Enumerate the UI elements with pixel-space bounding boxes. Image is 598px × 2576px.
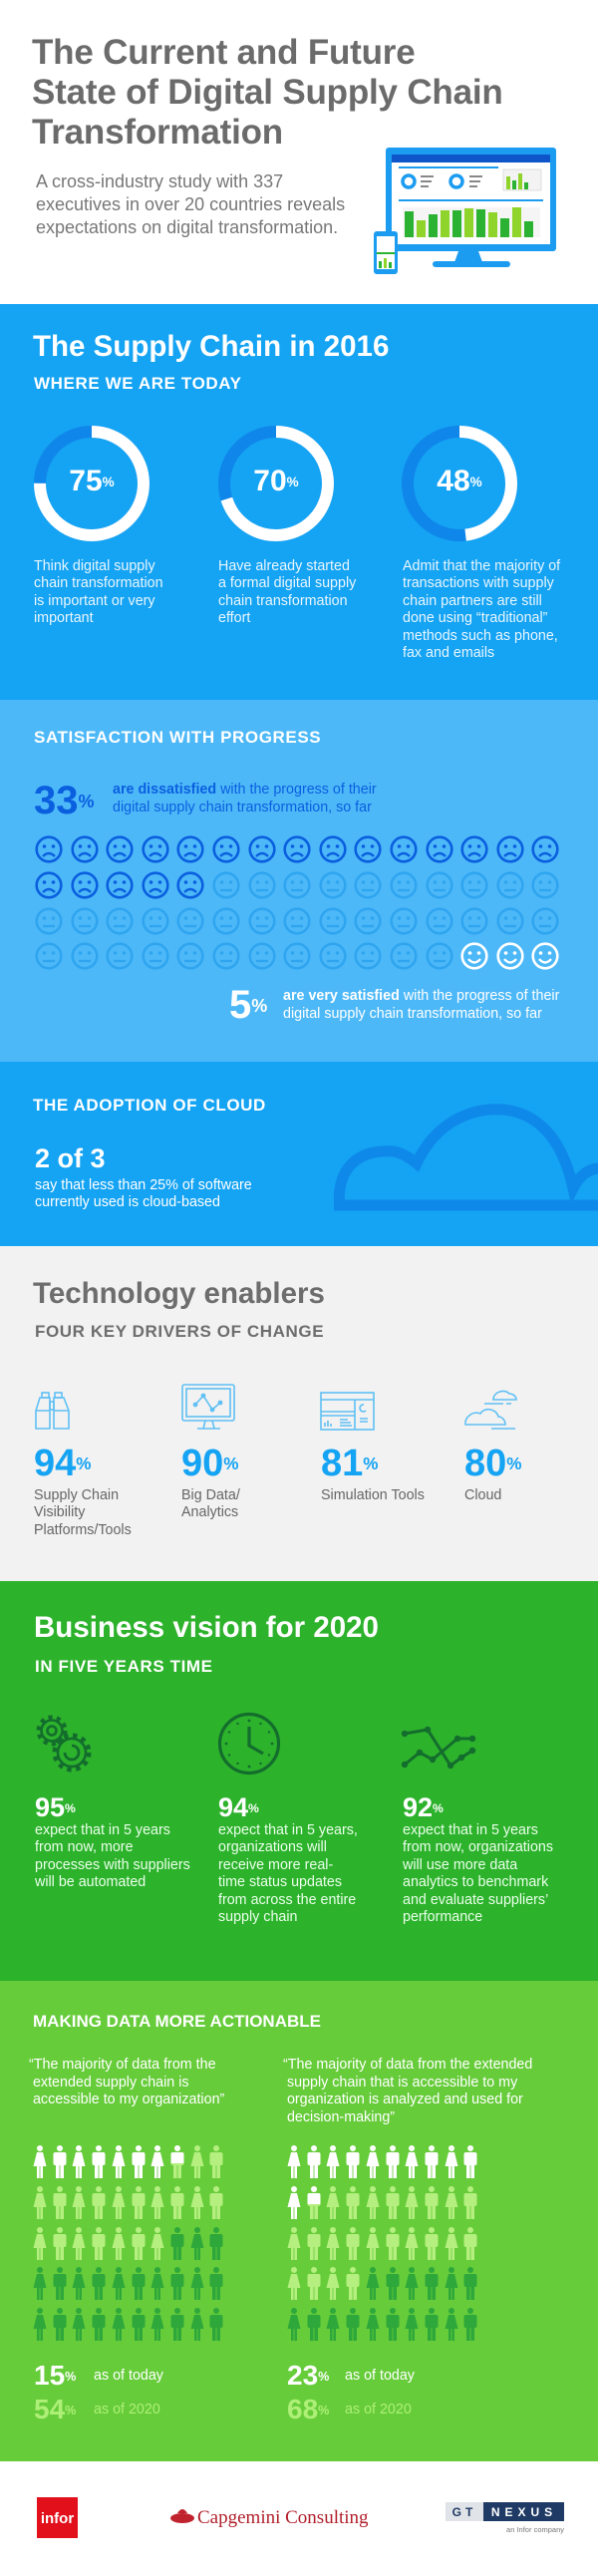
logo: GT Nexus: GT: [452, 2505, 476, 2519]
stat: 80% cloud: 80%: [464, 1443, 521, 1484]
subheading: where we are today: WHERE WE ARE TODAY: [34, 374, 242, 393]
title: The Current and Future: [32, 33, 415, 72]
heading: satisfaction with progress: SATISFACTION WITH PROGRESS: [34, 728, 321, 747]
text: 75% description: [34, 558, 163, 626]
icon: gears: [39, 1718, 89, 1770]
text: dissatisfied: digital supply chain transformation, so far: [113, 800, 372, 815]
stat: 15% today / 54% 2020: 54%: [34, 2394, 76, 2424]
text: 48% description: chain partners are still: [403, 593, 542, 609]
stat: 95% automated: 95%: [35, 1792, 76, 1822]
stat: 15% today / 54% 2020: as of today: [94, 2368, 163, 2384]
stat: 23% today / 68% 2020: as of today: [345, 2368, 415, 2384]
donut chart: 75%: [40, 432, 144, 535]
quote: accessible: “The majority of data from the: [29, 2057, 216, 2073]
logo: infor: infor: [41, 2510, 74, 2527]
text: 70% description: effort: [218, 610, 250, 626]
quote: accessible: [29, 2057, 224, 2107]
stat: 90% big data: Big Data/: [181, 1487, 240, 1503]
text: cloud statement: say that less than 25% of software: [35, 1177, 252, 1193]
stat: 23% today / 68% 2020: [287, 2360, 415, 2424]
subheading: in five years time: IN FIVE YEARS TIME: [35, 1657, 213, 1676]
icon: line chart: [402, 1727, 475, 1769]
stat: 92% analytics: [403, 1792, 553, 1925]
stat: 94% real-time: expect that in 5 years,: [218, 1822, 358, 1838]
stat: 5% very satisfied: 5%: [229, 983, 267, 1027]
text: 75% description: Think digital supply: [34, 558, 155, 574]
text: 48% description: fax and emails: [403, 645, 494, 661]
stat: 92% analytics: 92%: [403, 1792, 444, 1822]
stat: 80% cloud: [464, 1443, 521, 1503]
quote: accessible: accessible to my organization”: [33, 2092, 224, 2107]
text: 70% description: [218, 558, 357, 626]
background: satisfaction: [0, 700, 598, 1062]
logo: GT Nexus: an Infor company: [506, 2525, 564, 2534]
icon: binoculars: [36, 1393, 69, 1429]
text: 70% description: chain transformation: [218, 593, 348, 609]
text: dissatisfied: [113, 782, 377, 815]
heading: making data more actionable: MAKING DATA MORE ACTIONABLE: [33, 2012, 321, 2031]
stat: 92% analytics: expect that in 5 years: [403, 1822, 538, 1838]
donut chart: 70%: [224, 432, 328, 535]
background: cloud: [0, 1062, 598, 1246]
stat: 75%: 75%: [69, 465, 115, 497]
stat: 90% big data: [181, 1443, 240, 1520]
stat: 94% visibility: 94%: [34, 1443, 91, 1484]
quote: accessible: extended supply chain is: [33, 2075, 189, 2091]
donut chart: 48%: [408, 432, 511, 535]
stat: 95% automated: will be automated: [35, 1874, 146, 1890]
text: 48% description: Admit that the majority of: [403, 558, 560, 574]
text: 48% description: done using “traditional”: [403, 610, 547, 626]
stat: 94% real-time: 94%: [218, 1792, 259, 1822]
stat: 23% today / 68% 2020: as of 2020: [345, 2402, 412, 2417]
title: Transformation: [32, 113, 283, 152]
stat: 94% visibility: [34, 1443, 132, 1538]
face grid: satisfaction: [37, 837, 557, 968]
text: 75% description: chain transformation: [34, 575, 163, 591]
quote: analyzed: supply chain that is accessible to my: [287, 2075, 517, 2091]
stat: 90% big data: Analytics: [181, 1504, 238, 1520]
stat: 80% cloud: Cloud: [464, 1487, 501, 1503]
subheading: four key drivers: FOUR KEY DRIVERS OF CHANGE: [35, 1322, 324, 1341]
stat: 94% visibility: Supply Chain: [34, 1487, 119, 1503]
icon: cloud outline: [334, 1110, 598, 1207]
stat: 48%: 48%: [437, 465, 482, 497]
stat: 95% automated: expect that in 5 years: [35, 1822, 170, 1838]
stat: 81% simulation: [321, 1443, 425, 1503]
logo: GT Nexus: NEXUS: [491, 2505, 557, 2519]
quote: analyzed: “The majority of data from the extended: [283, 2057, 532, 2073]
stat: 95% automated: processes with suppliers: [35, 1857, 190, 1873]
stat: 15% today / 54% 2020: 15%: [34, 2360, 76, 2391]
stat: 94% real-time: [218, 1792, 358, 1925]
quote: analyzed: decision-making”: [287, 2109, 395, 2125]
heading: technology enablers: Technology enablers: [33, 1277, 325, 1310]
stat: 23% today / 68% 2020: 23%: [287, 2360, 329, 2391]
text: 70% description: a formal digital supply: [218, 575, 356, 591]
text: very satisfied: digital supply chain transformation, so far: [283, 1005, 542, 1021]
background: technology: [0, 1246, 598, 1581]
text: very satisfied: are very satisfied with the progress of their: [283, 988, 559, 1004]
stat: 94% real-time: receive more real-: [218, 1857, 333, 1873]
stat: 94% real-time: supply chain: [218, 1909, 297, 1925]
heading: business vision 2020: Business vision for 2020: [34, 1611, 379, 1644]
icon: dashboard window: [321, 1393, 374, 1430]
background: header: [0, 0, 598, 304]
stat: 92% analytics: from now, organizations: [403, 1839, 553, 1855]
stat: 92% analytics: performance: [403, 1909, 482, 1925]
text: very satisfied: [283, 988, 560, 1021]
subtitle: expectations on digital transformation.: [36, 217, 338, 237]
stat: 23% today / 68% 2020: 68%: [287, 2394, 329, 2424]
stat: 70%: 70%: [253, 465, 299, 497]
stat: 92% analytics: and evaluate suppliers’: [403, 1892, 548, 1908]
icon: clock: [219, 1715, 279, 1772]
subtitle: A cross-industry study with 337: [36, 171, 283, 191]
icon: monitor chart: [182, 1385, 234, 1429]
illustration: monitor dashboard: [374, 148, 556, 274]
text: 70% description: Have already started: [218, 558, 350, 574]
text: cloud statement: currently used is cloud-based: [35, 1194, 220, 1210]
subtitle: executives in over 20 countries reveals: [36, 194, 345, 214]
stat: 33% dissatisfied: 33%: [34, 779, 95, 822]
subtitle: [36, 171, 345, 237]
icon: clouds: [465, 1392, 516, 1429]
background: making data: [0, 1981, 598, 2461]
stat: 92% analytics: will use more data: [403, 1857, 517, 1873]
heading: adoption of cloud: THE ADOPTION OF CLOUD: [33, 1096, 266, 1115]
stat: 94% real-time: time status updates: [218, 1874, 342, 1890]
background: business vision: [0, 1581, 598, 1981]
stat: 2 of 3: 2 of 3: [35, 1143, 106, 1173]
people grid: accessible data (15% / 54%): [34, 2145, 223, 2341]
stat: 94% real-time: organizations will: [218, 1839, 327, 1855]
quote: analyzed: [283, 2057, 532, 2125]
text: 48% description: transactions with supply: [403, 575, 554, 591]
stat: 95% automated: from now, more: [35, 1839, 134, 1855]
logo: infor: [37, 2497, 78, 2538]
quote: analyzed: organization is analyzed and used for: [287, 2092, 523, 2107]
text: 75% description: is important or very: [34, 593, 155, 609]
heading: The Supply Chain in 2016: The Supply Chain in 2016: [33, 330, 389, 363]
background: supply chain 2016: [0, 304, 598, 700]
stat: 95% automated: [35, 1792, 190, 1890]
stat: 94% real-time: from across the entire: [218, 1892, 356, 1908]
logo: Capgemini Consulting: Capgemini Consulting: [197, 2507, 369, 2528]
logo: GT Nexus: [446, 2502, 564, 2534]
stat: 92% analytics: analytics to benchmark: [403, 1874, 548, 1890]
stat: 90% big data: 90%: [181, 1443, 238, 1484]
title: State of Digital Supply Chain: [32, 73, 503, 112]
text: 48% description: [403, 558, 560, 661]
stat: 15% today / 54% 2020: [34, 2360, 163, 2424]
stat: 81% simulation: 81%: [321, 1443, 378, 1484]
title: [32, 33, 503, 152]
people grid: analyzed data (23% / 68%): [287, 2145, 476, 2341]
stat: 15% today / 54% 2020: as of 2020: [94, 2402, 160, 2417]
stat: 81% simulation: Simulation Tools: [321, 1487, 425, 1503]
text: cloud statement: [35, 1177, 252, 1210]
text: 48% description: methods such as phone,: [403, 628, 558, 644]
stat: 94% visibility: Platforms/Tools: [34, 1522, 132, 1538]
text: dissatisfied: are dissatisfied with the progress of their: [113, 782, 377, 798]
stat: 94% visibility: Visibility: [34, 1504, 85, 1520]
text: 75% description: important: [34, 610, 94, 626]
